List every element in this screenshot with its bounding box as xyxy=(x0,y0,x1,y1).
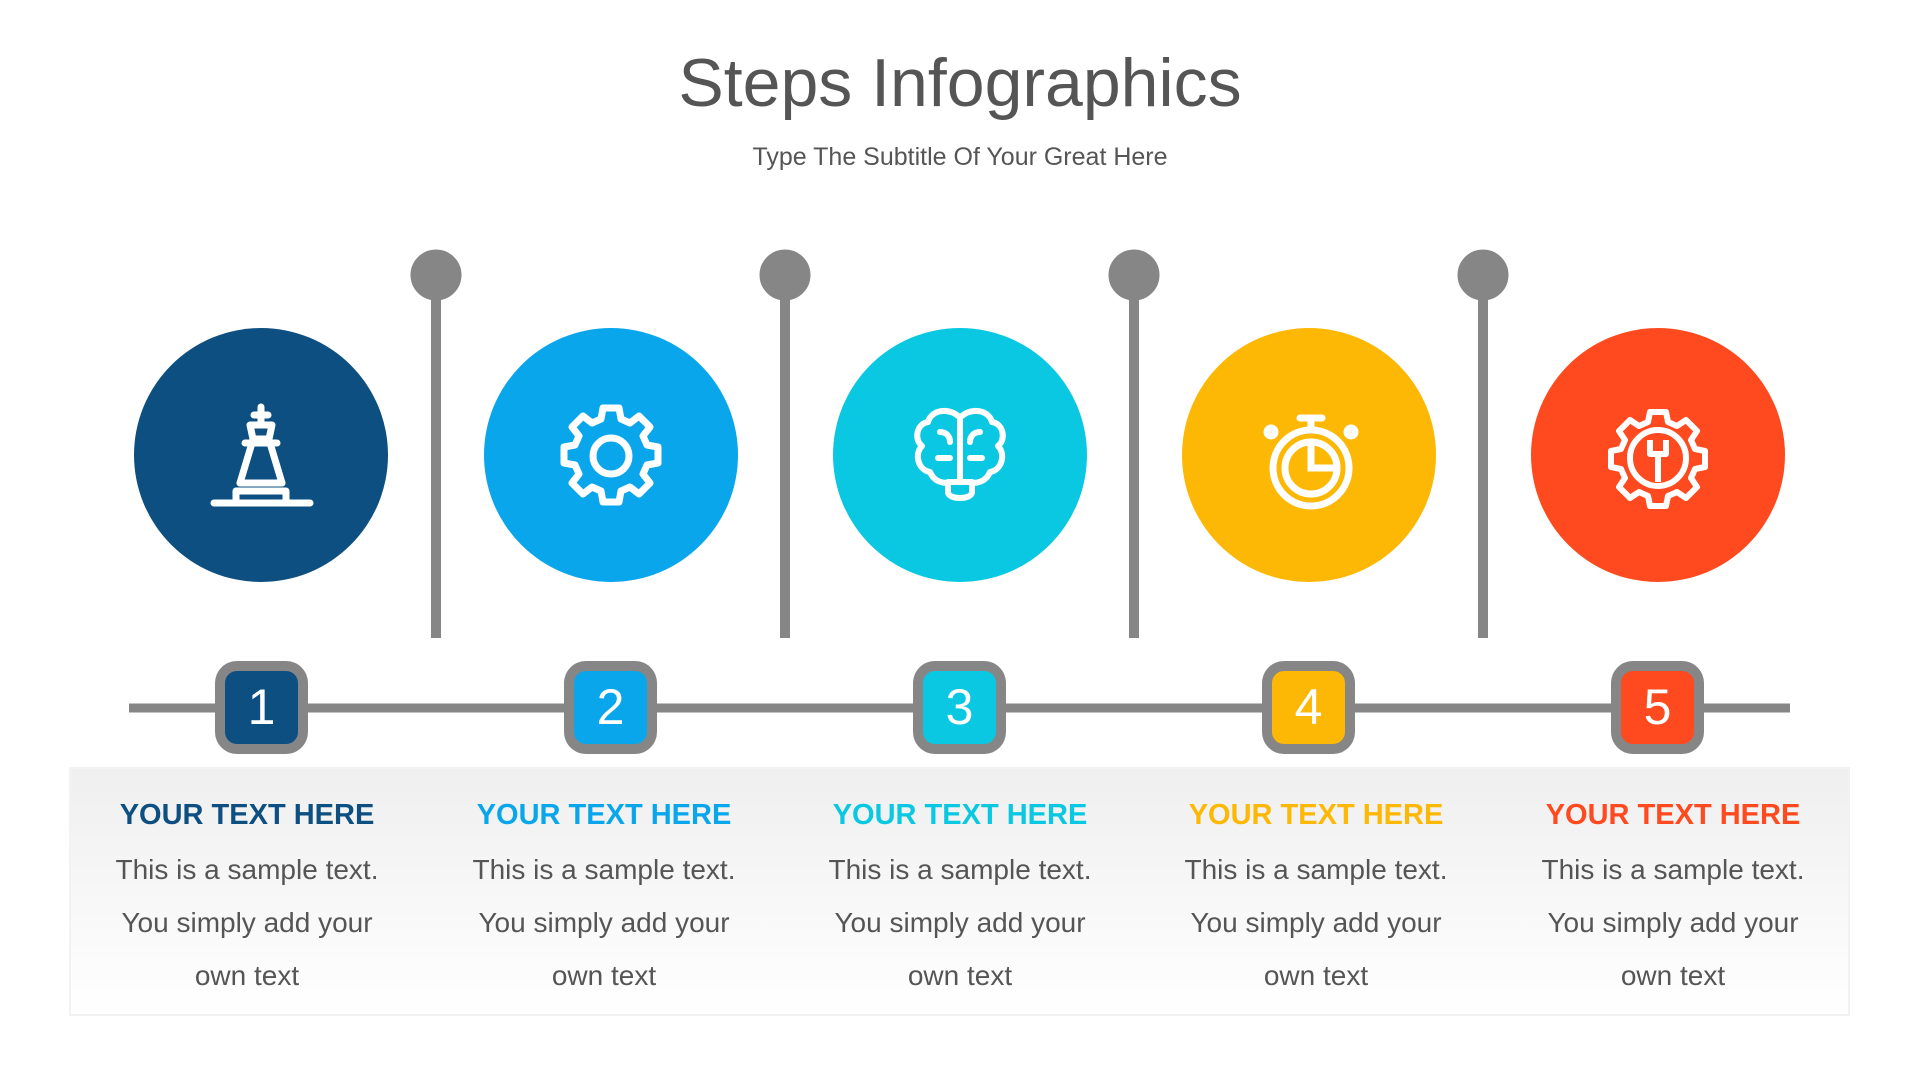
number box 4: 4 xyxy=(1295,679,1322,735)
title: Steps Infographics xyxy=(678,45,1242,121)
number box 5 xyxy=(1611,661,1704,754)
text block 3: YOUR TEXT HERE xyxy=(833,799,1087,831)
circle 2: gear icon xyxy=(484,328,738,582)
text block 1: YOUR TEXT HERE xyxy=(120,799,374,831)
text block 5: own text xyxy=(1621,960,1725,991)
text block 2: This is a sample text. xyxy=(472,854,735,885)
text block 2: You simply add your xyxy=(478,907,730,938)
text block 2: own text xyxy=(552,960,656,991)
timeline line xyxy=(129,704,1790,712)
text block 2 xyxy=(472,799,735,991)
text block 1: You simply add your xyxy=(121,907,373,938)
number box 1: 1 xyxy=(248,679,275,735)
number box 2: 2 xyxy=(597,679,624,735)
panel: text background xyxy=(69,767,1850,1016)
text block 1: own text xyxy=(195,960,299,991)
number box 2 xyxy=(564,661,657,754)
number box 3: 3 xyxy=(946,679,973,735)
text block 4: own text xyxy=(1264,960,1368,991)
circle 3: brain icon xyxy=(833,328,1087,582)
text block 5: This is a sample text. xyxy=(1542,854,1804,885)
text block 4 xyxy=(1184,799,1447,991)
text block 5: You simply add your xyxy=(1547,907,1799,938)
text block 1 xyxy=(116,799,378,991)
circle 4: stopwatch icon xyxy=(1182,328,1436,582)
circle 1: chess icon xyxy=(134,328,388,582)
number box 4 xyxy=(1262,661,1355,754)
subtitle: Type The Subtitle Of Your Great Here xyxy=(752,143,1168,171)
number box 5: 5 xyxy=(1644,679,1671,735)
text block 4: YOUR TEXT HERE xyxy=(1189,799,1443,831)
text block 1: This is a sample text. xyxy=(116,854,378,885)
text block 3 xyxy=(828,799,1091,991)
number box 3 xyxy=(913,661,1006,754)
text block 4: You simply add your xyxy=(1190,907,1442,938)
text block 5 xyxy=(1542,799,1804,991)
circle 5: gear wrench icon xyxy=(1531,328,1785,582)
text block 3: own text xyxy=(908,960,1012,991)
pins xyxy=(411,250,1508,638)
number box 1 xyxy=(215,661,308,754)
text block 3: This is a sample text. xyxy=(828,854,1091,885)
text block 3: You simply add your xyxy=(834,907,1086,938)
text block 4: This is a sample text. xyxy=(1184,854,1447,885)
text block 5: YOUR TEXT HERE xyxy=(1546,799,1800,831)
text block 2: YOUR TEXT HERE xyxy=(477,799,731,831)
